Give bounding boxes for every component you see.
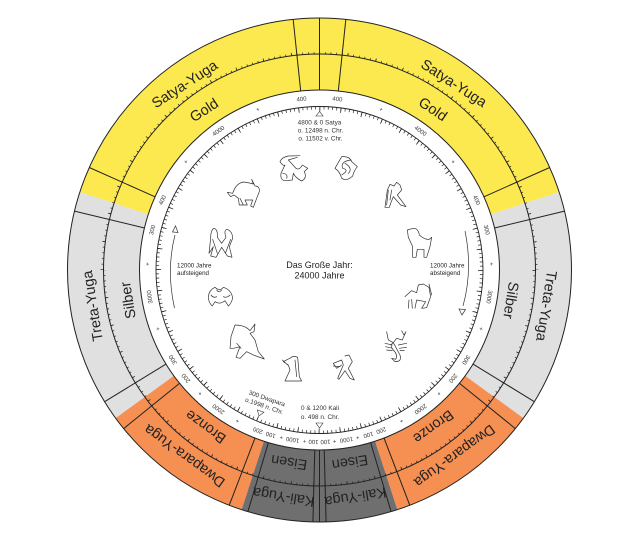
scale numbers: 200 [252, 425, 264, 434]
label: Eisen right: Eisen [331, 451, 369, 472]
icon: Taurus [227, 179, 259, 207]
label: Silber left: Silber [118, 280, 140, 320]
segment: yellow Satya-Yuga [80, 18, 559, 214]
scale numbers: 3000 [484, 290, 492, 304]
scale numbers: 100 [320, 438, 331, 444]
text: descending: 12000 Jahre [430, 262, 465, 270]
scale numbers: + [449, 159, 456, 166]
scale numbers: + [398, 417, 404, 424]
radial dividers [74, 18, 565, 522]
scale numbers: + [332, 437, 336, 444]
middle ring ticks [102, 52, 537, 488]
icon: Cancer [208, 287, 233, 306]
text: Kali start dates: o. 498 n. Chr. [301, 414, 339, 421]
scale numbers: 200 [181, 371, 192, 383]
scale numbers: 4000 [413, 125, 428, 138]
icon: Capricorn [280, 156, 308, 181]
text: descending: absteigend [430, 270, 461, 277]
text: Satya start dates [298, 120, 343, 142]
label: Kali-Yuga left: Kali-Yuga [251, 483, 316, 509]
circular yuga diagram [67, 18, 572, 522]
zodiac icons, upper right [335, 157, 432, 257]
label: Dwapara-Yuga right: Dwapara-Yuga [410, 421, 498, 490]
label: Bronze left: Bronze [183, 406, 229, 446]
segment: orange Dwapara-Yuga right [375, 376, 523, 510]
text: Dwapara start dates [244, 389, 287, 416]
zodiac icons, upper left [209, 156, 308, 257]
text: Dwapara start dates: o.1998 n. Chr. [244, 397, 284, 416]
icon: Gemini [209, 228, 233, 257]
scale numbers: + [146, 262, 152, 266]
segment: dark Kali-Yuga [242, 441, 397, 522]
scale numbers: + [487, 262, 493, 266]
scale numbers: 1000 [339, 435, 353, 443]
icon: Pisces [335, 157, 357, 180]
scale numbers: 3000 [146, 289, 155, 304]
label: Silber right: Silber [499, 281, 521, 320]
scale numbers: + [355, 433, 360, 440]
text: Kali start dates: 0 & 1200 Kali [301, 405, 339, 412]
scale numbers: 300 [168, 353, 179, 365]
segment: orange Dwapara-Yuga left [116, 376, 264, 510]
scale numbers: 100 [265, 429, 277, 438]
icon: Leo [230, 324, 264, 359]
scale numbers: 2000 [412, 402, 427, 415]
text: Satya start dates: 4800 & 0 Satya [298, 120, 342, 126]
scale numbers: 300 [482, 225, 490, 236]
scale numbers: 400 [296, 96, 308, 103]
scale numbers: + [256, 107, 261, 114]
label: Eisen left: Eisen [270, 451, 308, 472]
centre title: Das Große Jahr: [286, 260, 353, 270]
icon: Virgo [282, 356, 302, 381]
icon: Scorpio [385, 331, 407, 362]
scale numbers: 200 [374, 425, 387, 434]
scale numbers: 2000 [211, 402, 226, 415]
marker triangle: Dwapara [256, 410, 264, 417]
scale numbers: + [155, 325, 162, 331]
scale numbers: 400 [471, 195, 481, 207]
label: Bronze right: Bronze [410, 406, 456, 446]
icon: Sagittarius [405, 284, 432, 308]
text: ascending: 12000 Jahre [177, 262, 212, 270]
arrow: descending [459, 231, 469, 315]
scale numbers: + [477, 326, 484, 332]
text: ascending: aufsteigend [177, 270, 210, 277]
scale numbers: 300 [460, 354, 470, 366]
segment: grey Treta-Yuga right [465, 192, 572, 418]
scale numbers: 1000 [285, 435, 300, 443]
arrow: ascending [170, 226, 178, 308]
scale numbers: 4000 [212, 125, 227, 138]
icon: Aquarius [385, 182, 406, 207]
text: Kali start dates [301, 405, 339, 421]
ring outlines [68, 18, 572, 522]
scale numbers: + [279, 433, 284, 440]
zodiac icons, lower half [208, 284, 432, 381]
scale numbers: 300 [149, 224, 157, 236]
inner tick scale [156, 106, 483, 434]
scale numbers: 400 [159, 194, 168, 206]
text: Dwapara start dates: 300 Dwapara [248, 389, 286, 409]
label: Treta-Yuga left: Treta-Yuga [80, 268, 107, 342]
label: Treta-Yuga right: Treta-Yuga [532, 269, 559, 343]
marker triangle: top [316, 112, 323, 116]
centre title [286, 260, 353, 280]
text: descending [430, 262, 465, 277]
scale numbers: + [378, 107, 384, 114]
label: Dwapara-Yuga left: Dwapara-Yuga [141, 420, 228, 490]
scale numbers: + [302, 437, 307, 443]
text: Satya start dates: o. 12498 n. Chr. [298, 128, 343, 134]
label: Satya-Yuga right: Satya-Yuga [418, 57, 490, 111]
label: Kali-Yuga right: Kali-Yuga [322, 483, 387, 509]
segment: grey Treta-Yuga left [67, 192, 174, 418]
text: Satya start dates: o. 11502 v. Chr. [298, 136, 343, 142]
scale numbers: + [235, 417, 241, 424]
scale numbers: 200 [446, 372, 458, 384]
label: Gold right: Gold [415, 95, 450, 125]
label: Satya-Yuga left: Satya-Yuga [149, 57, 222, 112]
scale numbers: 100 [362, 430, 374, 438]
scale numbers: 400 [332, 96, 343, 104]
scale numbers: + [197, 389, 204, 396]
icon: Aries [407, 228, 432, 257]
text: ascending [177, 262, 212, 277]
scale numbers: 100 [308, 438, 319, 444]
icon: Libra [333, 355, 354, 380]
scale numbers: + [435, 390, 442, 397]
label: Gold left: Gold [187, 96, 222, 126]
scale numbers [146, 96, 493, 444]
scale numbers: + [183, 159, 190, 166]
centre title: 24000 Jahre [294, 270, 345, 280]
marker triangle: Kali [316, 423, 323, 428]
